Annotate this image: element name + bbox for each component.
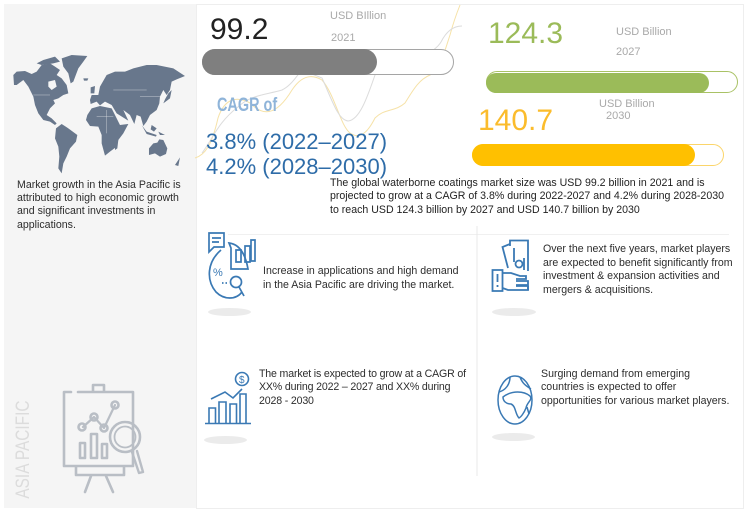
label: 2030 year: 2030 <box>606 110 630 122</box>
panel: main content <box>196 4 744 509</box>
text: emerging countries: countries is expected to offer <box>541 381 676 393</box>
text: CAGR growth statement <box>259 368 466 407</box>
text: market summary: The global waterborne coatings market size was USD 99.2 billion in 2021 and is <box>330 177 705 189</box>
metric: 2030 value: 140.7 <box>478 104 553 137</box>
icon shadow: growth chart <box>204 436 247 444</box>
icon shadow: globe <box>492 433 535 441</box>
text: CAGR growth statement: The market is expected to grow at a CAGR of <box>259 368 466 380</box>
text: driving the market: in the Asia Pacific are driving the market. <box>263 279 454 291</box>
text: Asia Pacific market growth note: attributed to high economic growth <box>17 192 179 204</box>
icon: market analysis: % <box>213 267 223 279</box>
label: 2027 year: 2027 <box>616 46 640 58</box>
metric: 2027 value: 124.3 <box>488 17 563 50</box>
icon shadow: hand with money <box>492 308 536 316</box>
metric: 2021 value: 99.2 <box>210 13 268 46</box>
label: Asia Pacific vertical: ASIA PACIFIC <box>13 401 34 499</box>
text: market summary <box>330 177 724 216</box>
text: emerging countries: opportunities for various market players. <box>541 395 729 407</box>
text: Asia Pacific market growth note: and significant investments in <box>17 205 155 217</box>
bar: 2030 <box>472 144 724 166</box>
text: Asia Pacific market growth note <box>17 179 181 231</box>
text: market players benefit: are expected to benefit significantly from <box>543 257 733 269</box>
text: market players benefit: investment & expansion activities and <box>543 270 720 282</box>
text: market summary: projected to grow at a CAGR of 3.8% during 2022-2027 and 4.2% during 2028-2030 <box>330 190 724 202</box>
panel: left sidebar <box>4 4 196 508</box>
text: market players benefit: mergers & acquisitions. <box>543 284 653 296</box>
text: CAGR growth statement: XX% during 2022 – 2027 and XX% during <box>259 381 450 393</box>
label: 2027 unit: USD Billion <box>616 26 672 38</box>
label: 2021 year: 2021 <box>331 32 355 44</box>
label: 2030 unit: USD Billion <box>599 98 655 110</box>
text: Asia Pacific market growth note: Market growth in the Asia Pacific is <box>17 179 181 191</box>
text: market players benefit: Over the next five years, market players <box>543 243 730 255</box>
bar: 2021 <box>202 49 454 75</box>
bar: 2027 <box>486 71 738 93</box>
text: market summary: to reach USD 124.3 billion by 2027 and USD 140.7 billion by 2030 <box>330 204 640 216</box>
text: CAGR values: 4.2% (2028–2030) <box>206 154 387 179</box>
label: 2021 unit: USD BIllion <box>330 10 386 22</box>
text: driving the market <box>263 265 459 291</box>
text: CAGR growth statement: 2028 - 2030 <box>259 395 314 407</box>
text: CAGR values: 3.8% (2022–2027) <box>206 129 387 154</box>
text: CAGR values <box>206 129 387 179</box>
icon: growth chart with dollar: $ <box>239 375 245 386</box>
heading: CAGR of: CAGR of <box>217 95 277 116</box>
icon shadow: market analysis <box>208 308 251 316</box>
text: emerging countries <box>541 368 729 407</box>
text: driving the market: Increase in applications and high demand <box>263 265 459 277</box>
text: emerging countries: Surging demand from emerging <box>541 368 690 380</box>
text: Asia Pacific market growth note: applications. <box>17 219 76 231</box>
text: market players benefit <box>543 243 733 296</box>
